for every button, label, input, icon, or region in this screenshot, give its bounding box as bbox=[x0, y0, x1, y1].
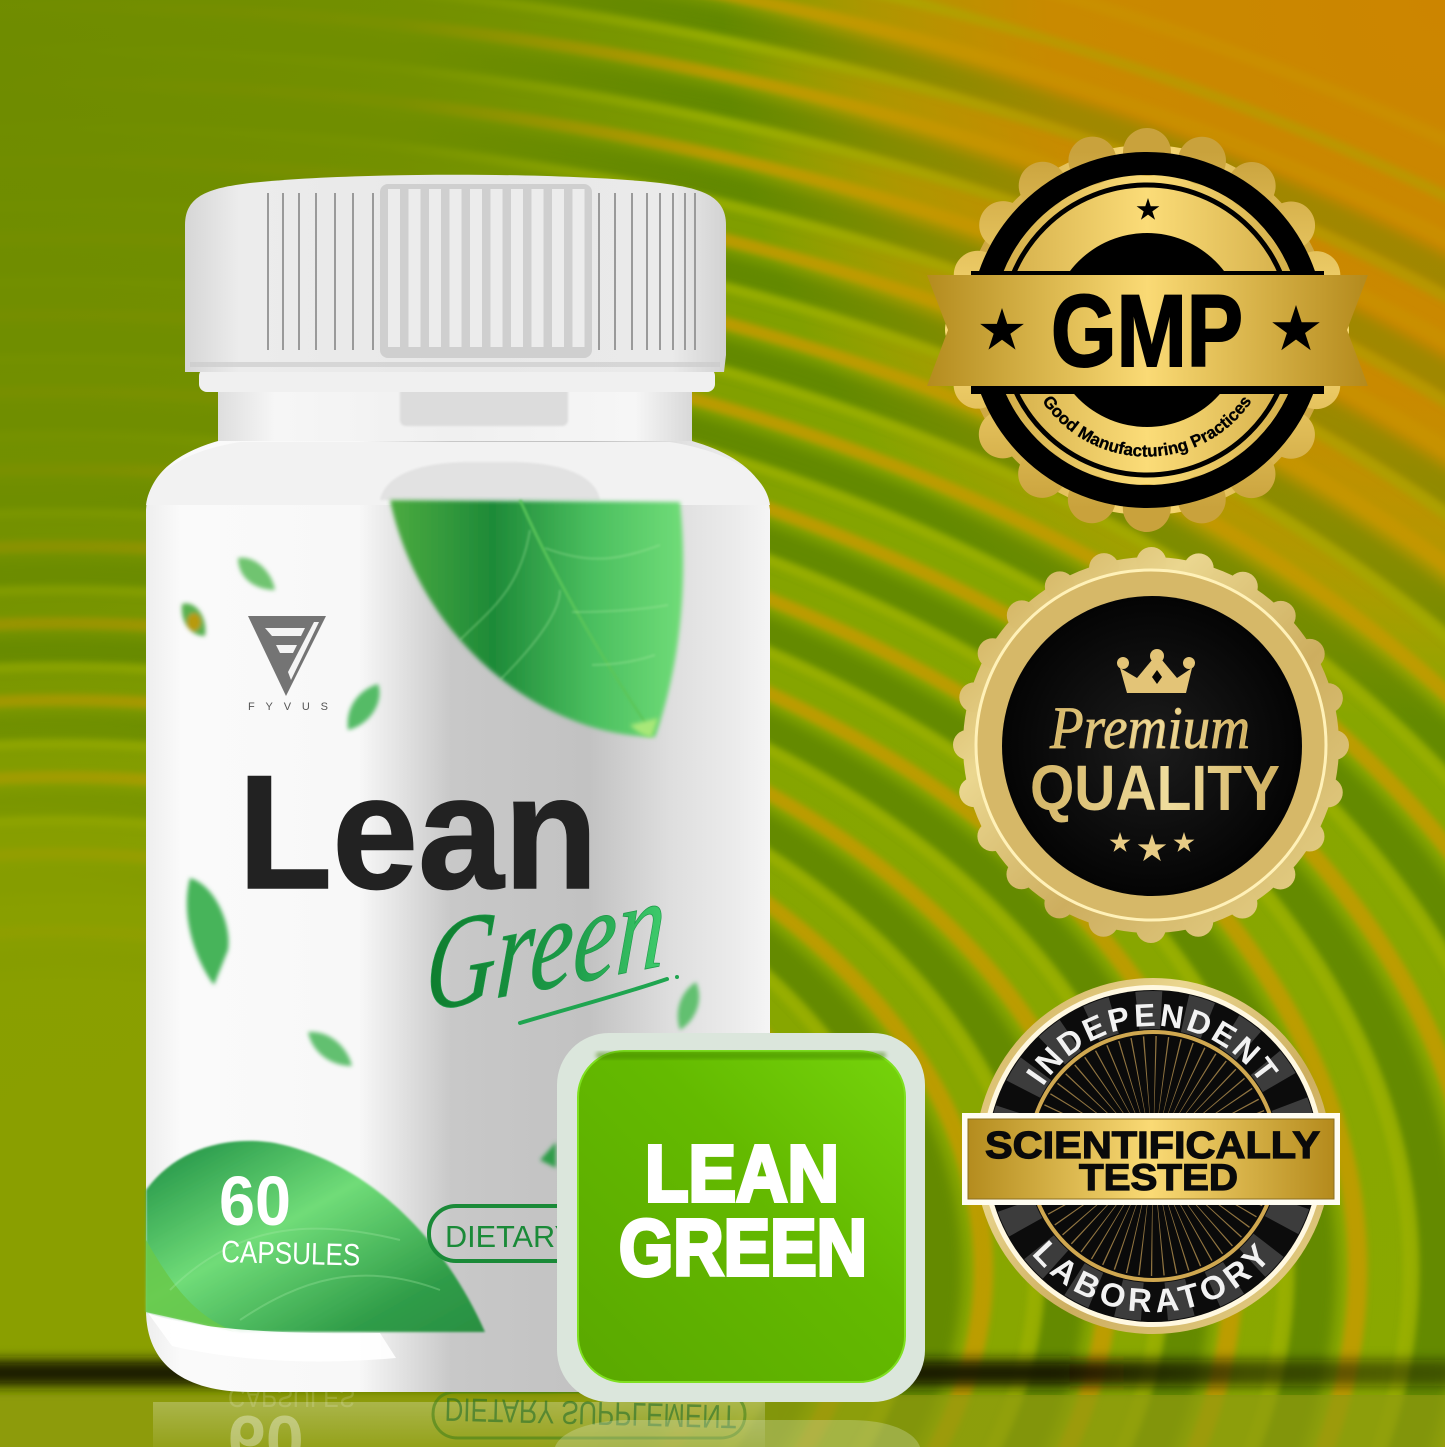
cap text: LEAN bbox=[645, 1129, 839, 1218]
cap text bbox=[619, 1129, 867, 1292]
dietary supplement pill bbox=[429, 1206, 609, 1261]
capsule count bbox=[219, 1162, 361, 1273]
banner text: TESTED bbox=[1079, 1157, 1238, 1198]
black disc bbox=[987, 990, 1319, 1322]
stars bbox=[1110, 832, 1194, 861]
banner text: SCIENTIFICALLY bbox=[985, 1125, 1320, 1167]
script word: Premium bbox=[1049, 695, 1250, 761]
shoulder grey reflection bbox=[380, 462, 600, 500]
brand logo bbox=[248, 616, 328, 713]
badge: premium quality bbox=[963, 557, 1339, 933]
white banner bbox=[962, 1113, 1340, 1205]
ribbon stars bbox=[980, 308, 1024, 350]
badge: GMP bbox=[927, 128, 1368, 532]
green face bbox=[578, 1051, 905, 1382]
bottle bbox=[146, 175, 770, 1392]
black disc bbox=[1002, 596, 1302, 896]
bottle reflection: CAPSULES bbox=[228, 1382, 355, 1413]
quality word: QUALITY bbox=[1030, 752, 1280, 824]
badge: scientifically tested bbox=[962, 978, 1340, 1334]
banner text bbox=[985, 1125, 1320, 1198]
top arc text: INDEPENDENT bbox=[1026, 1004, 1279, 1085]
bottle neck bbox=[218, 385, 692, 455]
bottle body bbox=[146, 441, 770, 1392]
cap text: GREEN bbox=[619, 1203, 867, 1292]
black ribbon edges bbox=[971, 271, 1324, 394]
sunburst rays bbox=[1075, 1078, 1231, 1234]
GMP text: GMP bbox=[1051, 274, 1243, 388]
inner gold ring bbox=[976, 570, 1326, 920]
top star bbox=[1137, 198, 1159, 220]
bottom leaf bbox=[146, 1141, 485, 1332]
bottle reflection: DIETARY SUPPLEMENT bbox=[444, 1391, 737, 1436]
shoulder highlight bbox=[146, 442, 770, 505]
capsule count: 60 bbox=[219, 1162, 291, 1240]
inner gold ring bbox=[1029, 1032, 1277, 1280]
crown bbox=[1117, 649, 1195, 693]
bottle reflection bbox=[153, 1382, 920, 1447]
bottle cap bbox=[185, 175, 726, 392]
small floating leaves bbox=[182, 558, 699, 1168]
large top leaf bbox=[390, 500, 683, 737]
floor shadow under the bottle bbox=[0, 1360, 1445, 1386]
neck grey reflection bbox=[400, 386, 568, 426]
dietary supplement pill: DIETARY bbox=[445, 1219, 575, 1254]
curved caption: Good Manufacturing Practices bbox=[1044, 396, 1251, 457]
product name: Green: Green bbox=[422, 849, 670, 1041]
gold banner bbox=[968, 1119, 1334, 1199]
grey ring segments bbox=[1007, 1010, 1299, 1302]
outer rim bbox=[975, 978, 1331, 1334]
bottom arc text: LABORATORY bbox=[1032, 1240, 1266, 1312]
brand logo: FYVUS bbox=[248, 701, 328, 713]
gold ribbon bbox=[927, 275, 1368, 386]
scalloped gold seal bbox=[963, 557, 1339, 933]
lean green square cap bbox=[557, 1033, 925, 1402]
lower bottle white highlight bbox=[148, 1313, 396, 1362]
scalloped gold seal bbox=[962, 145, 1332, 515]
black rings bbox=[980, 164, 1314, 496]
capsule count: CAPSULES bbox=[221, 1234, 361, 1273]
product name: Lean: Lean bbox=[238, 742, 598, 923]
